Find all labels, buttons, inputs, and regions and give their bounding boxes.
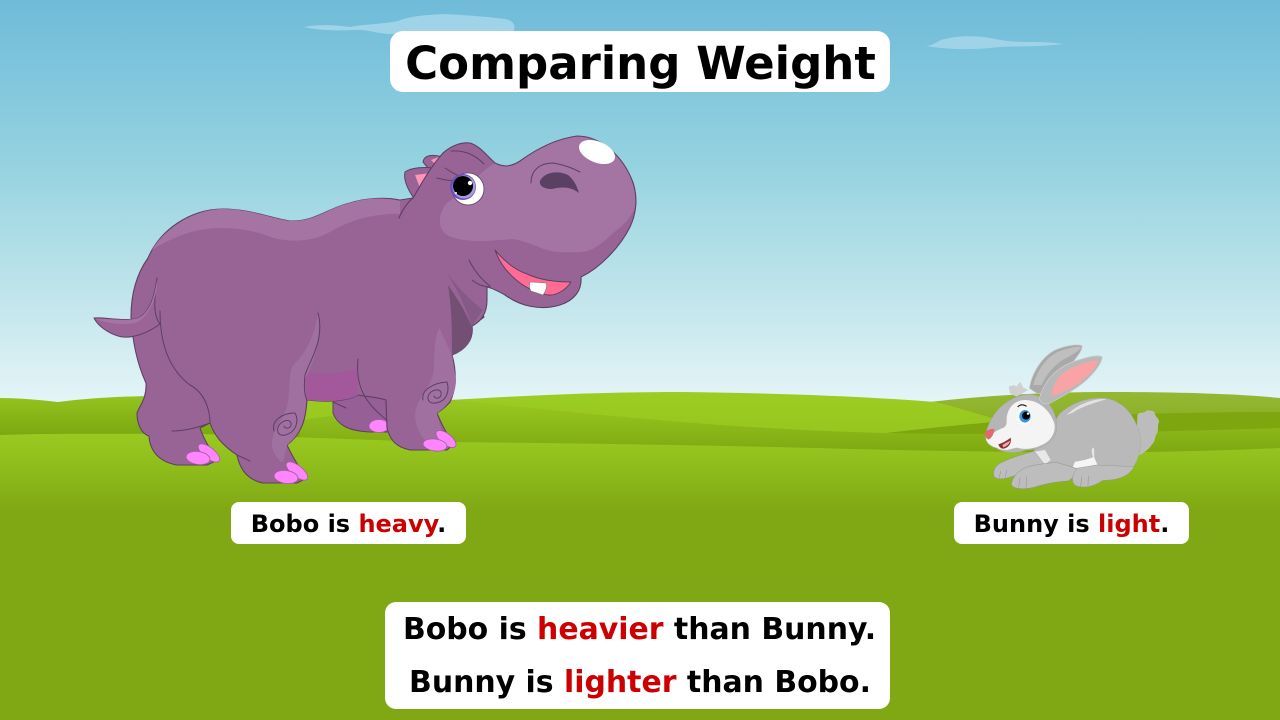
ears xyxy=(405,155,442,200)
title box xyxy=(390,31,890,92)
hippo body xyxy=(131,198,484,483)
eyelashes xyxy=(437,151,484,180)
clouds xyxy=(304,14,1063,49)
comparison line 1: Bobo is heavier than Bunny. xyxy=(403,612,876,647)
hooves xyxy=(185,427,459,485)
mouth xyxy=(495,250,571,295)
back highlight xyxy=(152,199,400,250)
body xyxy=(1033,398,1140,475)
hippo head fill xyxy=(399,136,636,355)
comparison line 2: Bunny is lighter than Bobo. xyxy=(409,665,871,700)
neck fold shadow xyxy=(443,267,483,355)
caption: Bunny: Bunny is light. xyxy=(974,510,1169,538)
bunny xyxy=(985,345,1159,489)
caption: Bobo: Bobo is heavy. xyxy=(251,510,446,538)
head outline xyxy=(399,136,636,355)
mouth xyxy=(998,438,1011,449)
near paw xyxy=(1011,462,1082,489)
head xyxy=(985,394,1057,453)
fur tuft xyxy=(1009,382,1028,397)
back foot xyxy=(1073,465,1134,487)
nose xyxy=(985,429,994,440)
bunny eye xyxy=(1017,405,1031,425)
face white xyxy=(986,400,1055,450)
tail xyxy=(1137,411,1159,456)
tail xyxy=(94,278,160,337)
inner ear xyxy=(1052,361,1098,396)
nostril xyxy=(540,172,579,193)
hippo Bobo xyxy=(94,135,637,485)
caption: Bunny xyxy=(954,502,1189,544)
comparison box xyxy=(385,602,890,709)
far hoof xyxy=(369,420,389,432)
far paw xyxy=(994,450,1047,479)
belly xyxy=(305,368,358,401)
hind leg highlight xyxy=(272,313,319,463)
front leg highlight xyxy=(415,320,456,444)
swirls on legs xyxy=(274,382,448,435)
background: green hills xyxy=(0,392,1280,720)
nostril highlight xyxy=(575,135,619,169)
eye xyxy=(450,173,484,205)
toe lines xyxy=(999,470,1088,488)
head highlight xyxy=(440,136,637,252)
back ear xyxy=(1029,345,1082,393)
inner ears xyxy=(415,156,441,188)
far legs xyxy=(333,395,400,432)
chin line xyxy=(469,260,490,287)
tooth xyxy=(529,282,547,295)
caption: Bobo xyxy=(231,502,466,544)
body crease lines xyxy=(160,311,387,461)
title text: Comparing Weight xyxy=(405,37,876,90)
background: sky xyxy=(0,0,1280,405)
body shading xyxy=(1067,399,1107,415)
white belly xyxy=(1072,457,1099,471)
front ear xyxy=(1039,356,1102,404)
